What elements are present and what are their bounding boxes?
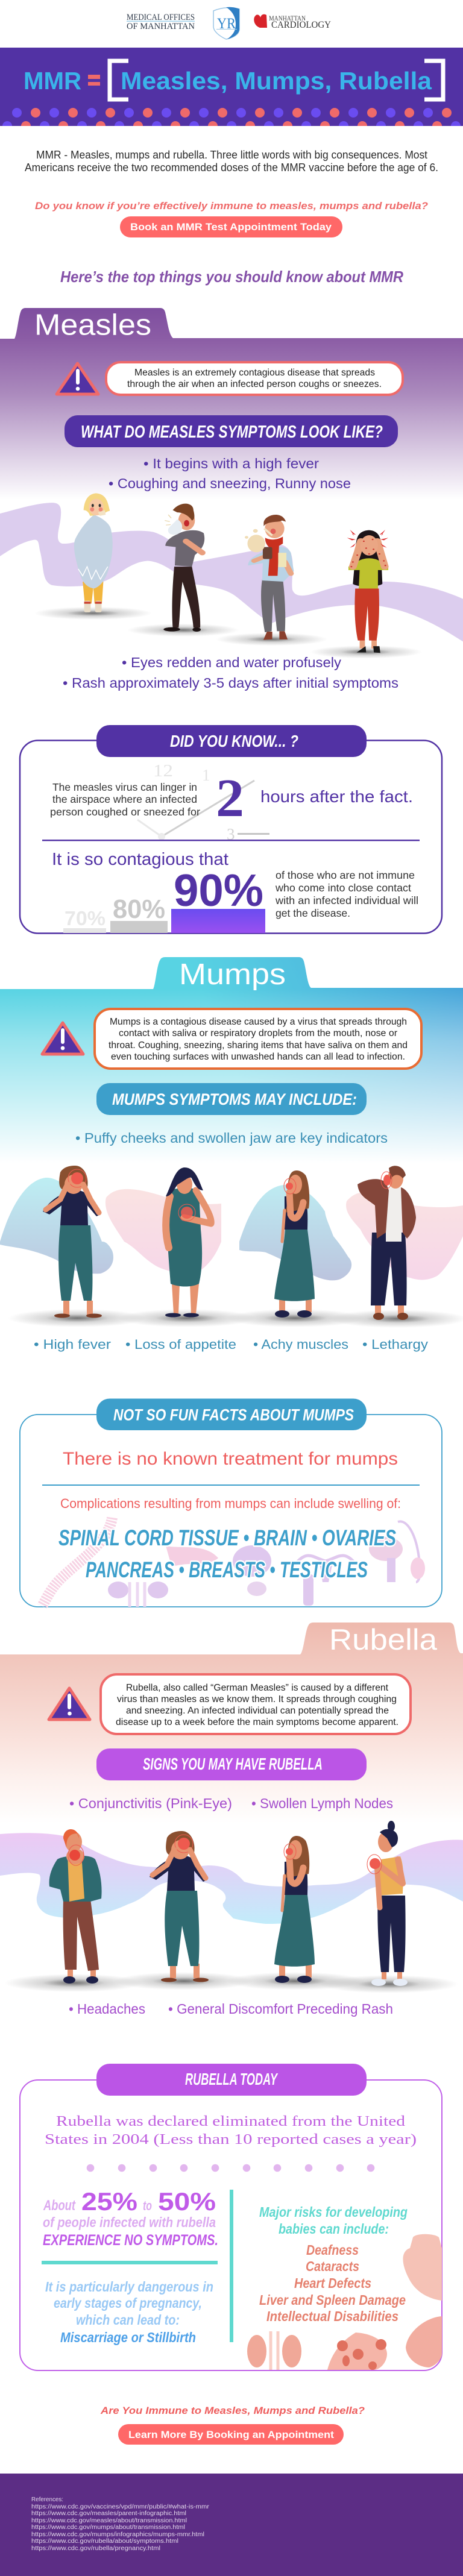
background wave <box>0 1833 463 1924</box>
bullets: later measles symptoms: • Eyes redden and water profusely <box>122 655 342 670</box>
bullets: mumps symptoms row: • Loss of appetite <box>125 1337 236 1352</box>
stat: 25% to 50% without symptoms: 50% <box>158 2187 216 2216</box>
measles tab title: Measles <box>34 309 151 341</box>
heading bar: rubella today: RUBELLA TODAY <box>185 2070 279 2088</box>
person: woman with headache <box>115 1831 253 1990</box>
heading bar: mumps symptoms: MUMPS SYMPTOMS MAY INCLUDE: <box>112 1090 357 1108</box>
footer: references: References: <box>31 2496 63 2503</box>
bullets: mumps symptoms row <box>34 1337 428 1352</box>
person: woman with cheek pain <box>226 1170 365 1327</box>
logo: Manhattan Cardiology <box>254 14 331 30</box>
text: who get the disease: with an infected individual will <box>275 894 418 906</box>
title: bracketed disease names <box>110 61 443 99</box>
bullets: mumps symptoms row: • Achy muscles <box>253 1337 348 1352</box>
stat: 2 hours <box>216 768 413 828</box>
footer: references: https://www.cdc.gov/measles/parent-infographic.html <box>31 2510 186 2517</box>
bullets: later measles symptoms: • Rash approximately 3-5 days after initial symptoms <box>63 675 398 691</box>
stat: 25% to 50% without symptoms: About <box>43 2197 76 2214</box>
callout: mumps definition: even touching surfaces with unwashed hands can all lead to infection. <box>111 1052 405 1062</box>
person: woman with rash on arm <box>320 1821 458 1993</box>
heading bar: rubella today <box>96 2064 367 2096</box>
person: woman with rash and headache <box>310 530 422 658</box>
bullets: first rubella signs <box>69 1795 393 1811</box>
bar chart: percentages <box>63 865 265 933</box>
callout: rubella definition: disease up to a week before the main symptoms become apparent. <box>116 1717 398 1727</box>
icon: warning triangle <box>49 1688 90 1720</box>
stat: 25% to 50% without symptoms: EXPERIENCE NO SYMPTOMS. <box>43 2232 218 2249</box>
text: virus lingers <box>50 781 200 818</box>
stat: 2 hours: hours after the fact. <box>260 787 413 806</box>
text: danger in pregnancy: Miscarriage or Stillbirth <box>60 2329 196 2345</box>
text: who get the disease <box>275 869 418 919</box>
text: risks for developing babies: Deafness <box>306 2242 359 2258</box>
intro text <box>25 149 438 174</box>
callout: measles definition: Measles is an extremely contagious disease that spreads <box>134 368 375 378</box>
text: risks for developing babies: babies can include: <box>279 2221 389 2237</box>
person: blanket with thermometer <box>34 493 152 620</box>
stat: 25% to 50% without symptoms: of people infected with rubella <box>43 2214 216 2230</box>
bullets: first measles symptoms: • Coughing and sneezing, Runny nose <box>109 476 351 491</box>
text: who get the disease: of those who are not immune <box>276 869 415 881</box>
callout: mumps definition: contact with saliva or respiratory droplets from the mouth, nose or <box>119 1028 397 1038</box>
bullets: mumps symptoms row: • High fever <box>34 1337 111 1352</box>
background wave <box>0 503 463 641</box>
title: bracketed disease names: Measles, Mumps, Rubella <box>121 67 432 95</box>
faint organ illustrations <box>42 1518 425 1607</box>
intro text: MMR - Measles, mumps and rubella. Three little words with big consequences. Most <box>36 149 427 161</box>
mumps tab title: Mumps <box>179 958 286 991</box>
panel: did you know <box>20 725 442 933</box>
button: book test <box>120 216 342 237</box>
faint clock: 3 <box>227 825 235 843</box>
dot pattern <box>2 108 461 126</box>
footer: references: https://www.cdc.gov/mumps/about/transmission.html <box>31 2524 185 2531</box>
intro text: Americans receive the two recommended doses of the MMR vaccine before the age of 6. <box>25 162 438 174</box>
text: so contagious: It is so contagious that <box>52 850 228 869</box>
heading bar: measles symptoms: WHAT DO MEASLES SYMPTOMS LOOK LIKE? <box>81 423 383 442</box>
bar chart: percentages: 70% <box>65 907 106 929</box>
person: woman with throat pain and scarf <box>4 1829 143 1992</box>
question: Do you know if you’re effectively immune to measles, mumps and rubella? <box>35 200 429 212</box>
text: virus lingers: The measles virus can linger in <box>52 781 197 793</box>
bar chart: percentages: 90% <box>174 865 263 916</box>
heading bar: mumps symptoms <box>96 1083 367 1115</box>
text: danger in pregnancy: It is particularly dangerous in <box>45 2279 213 2295</box>
logo: Medical Offices of Manhattan <box>127 13 195 31</box>
person: man with jaw pain <box>329 1166 463 1328</box>
heading bar: fun facts: NOT SO FUN FACTS ABOUT MUMPS <box>113 1406 354 1424</box>
logo: Medical Offices of Manhattan: MEDICAL OFFICES <box>127 13 195 22</box>
rubella tab title: Rubella <box>329 1624 438 1656</box>
heading: top things: Here’s the top things you should know about MMR <box>60 268 403 286</box>
callout: rubella definition: virus than measles as we know them. It spreads through coughing <box>117 1694 397 1704</box>
background blobs <box>0 1178 463 1280</box>
icon: warning triangle <box>42 1023 83 1054</box>
illustration: measles patients on wave <box>0 493 463 658</box>
text: who get the disease: who come into close contact <box>275 882 411 894</box>
text: risks for developing babies: Liver and Spleen Damage <box>259 2292 406 2308</box>
logos header <box>127 7 331 39</box>
footer: references <box>0 2474 463 2576</box>
banner <box>0 48 463 131</box>
faint organ illustrations <box>247 2234 442 2370</box>
callout: measles definition: through the air when an infected person coughs or sneezes. <box>127 379 382 389</box>
bar chart: percentages: 80% <box>113 894 165 924</box>
footer: references: https://www.cdc.gov/measles/about/transmission.html <box>31 2518 187 2524</box>
text: virus lingers: person coughed or sneezed for <box>50 806 200 818</box>
person: woman holding head, navy top <box>8 1166 146 1327</box>
heading bar: signs of rubella <box>96 1748 367 1780</box>
logo: YR shield: YR <box>217 16 236 32</box>
panel: not so fun facts <box>20 1398 442 1607</box>
bullets: later rubella signs <box>69 2001 393 2017</box>
stat: 25% to 50% without symptoms: to <box>143 2198 152 2213</box>
button: book test: Book an MMR Test Appointment Today <box>130 222 332 233</box>
text: danger in pregnancy: early stages of pregnancy, <box>54 2295 202 2311</box>
logo: YR shield <box>213 7 239 39</box>
bullets: later rubella signs: • General Discomfort Preceding Rash <box>168 2001 393 2017</box>
text: risks for developing babies <box>259 2204 408 2324</box>
faint clock: 12 <box>153 761 173 781</box>
faint clock: 1 <box>202 766 210 784</box>
callout: rubella definition <box>101 1674 411 1734</box>
bullets: mumps symptoms row: • Lethargy <box>362 1337 428 1352</box>
text: risks for developing babies: Major risks for developing <box>259 2204 408 2220</box>
logo: Manhattan Cardiology: MANHATTAN <box>269 14 306 22</box>
text: declared eliminated <box>45 2114 417 2147</box>
illustration: mumps patients <box>0 1166 463 1328</box>
footer: references: https://www.cdc.gov/rubella/pregnancy.html <box>31 2545 160 2552</box>
text: danger in pregnancy: which can lead to: <box>76 2312 180 2328</box>
logo: Manhattan Cardiology: CARDIOLOGY <box>271 20 331 30</box>
person: man sneezing into tissue <box>127 504 239 636</box>
text: declared eliminated: Rubella was declared eliminated from the United <box>56 2114 405 2129</box>
bullets: later measles symptoms <box>63 655 398 691</box>
title: MMR =: MMR <box>24 67 81 95</box>
text: danger in pregnancy <box>45 2279 213 2345</box>
heading bar: signs of rubella: SIGNS YOU MAY HAVE RUBELLA <box>143 1755 323 1773</box>
callout: mumps definition <box>95 1009 421 1069</box>
bullets: first measles symptoms <box>109 456 351 491</box>
button: learn more: Learn More By Booking an Appointment <box>128 2429 334 2440</box>
text: risks for developing babies: Heart Defects <box>294 2275 371 2291</box>
bullets: first rubella signs: • Conjunctivitis (Pink-Eye) <box>69 1795 232 1811</box>
text: virus lingers: the airspace where an infected <box>52 793 197 805</box>
mumps section background and tab <box>0 957 463 1164</box>
text: who get the disease: get the disease. <box>276 907 350 919</box>
footer: references: https://www.cdc.gov/rubella/about/symptoms.html <box>31 2538 178 2545</box>
statement: no known treatment: There is no known treatment for mumps <box>63 1449 398 1469</box>
callout: rubella definition: Rubella, also called “German Measles” is caused by a different <box>126 1683 389 1693</box>
person: woman with swollen cheek <box>226 1836 365 1990</box>
illustration: rubella patients <box>0 1821 463 1993</box>
heading bar: did you know <box>96 725 367 757</box>
button: learn more <box>118 2424 344 2445</box>
stat: 25% to 50% without symptoms: 25% <box>81 2187 137 2216</box>
person: man with scarf and mug <box>216 515 328 646</box>
bullets: later rubella signs: • Headaches <box>69 2001 145 2017</box>
panel: rubella today <box>20 2064 442 2370</box>
faint clock <box>137 761 269 843</box>
measles section background and tab <box>0 308 463 500</box>
bullets: first rubella signs: • Swollen Lymph Nodes <box>251 1795 393 1811</box>
text: complications: Complications resulting from mumps can include swelling of: <box>60 1496 401 1511</box>
icon: warning triangle <box>57 363 98 394</box>
stat: 25% to 50% without symptoms <box>43 2187 218 2249</box>
footer: references: https://www.cdc.gov/mumps/infographics/mumps-mmr.html <box>31 2531 204 2538</box>
text: declared eliminated: States in 2004 (Less than 10 reported cases a year) <box>45 2132 417 2147</box>
heading bar: measles symptoms <box>65 415 398 447</box>
list: complication sites <box>58 1525 396 1582</box>
stat: 2 hours: 2 <box>216 768 244 828</box>
footer: references: https://www.cdc.gov/vaccines/vpd/mmr/public/#what-is-mmr <box>31 2504 210 2510</box>
callout: mumps definition: Mumps is a contagious disease caused by a virus that spreads through <box>110 1017 407 1027</box>
heading bar: fun facts <box>96 1398 367 1430</box>
callout: rubella definition: and sneezing. An infected individual can potentially spread the <box>126 1706 389 1716</box>
callout: mumps definition: throat. Coughing, sneezing, sharing items that have saliva on them and <box>109 1040 408 1051</box>
heading bar: did you know: DID YOU KNOW... ? <box>170 732 298 750</box>
closing question: Are You Immune to Measles, Mumps and Rubella? <box>100 2405 365 2416</box>
bullets: first measles symptoms: • It begins with a high fever <box>143 456 319 471</box>
bullet: puffy cheeks: • Puffy cheeks and swollen jaw are key indicators <box>75 1130 388 1146</box>
text: risks for developing babies: Cataracts <box>306 2258 359 2274</box>
logo: Medical Offices of Manhattan: OF MANHATTAN <box>127 22 195 31</box>
text: risks for developing babies: Intellectual Disabilities <box>266 2308 398 2324</box>
person: woman holding stomach <box>118 1167 256 1327</box>
callout: measles definition <box>106 362 403 395</box>
rubella section background and tab <box>0 1623 463 1823</box>
